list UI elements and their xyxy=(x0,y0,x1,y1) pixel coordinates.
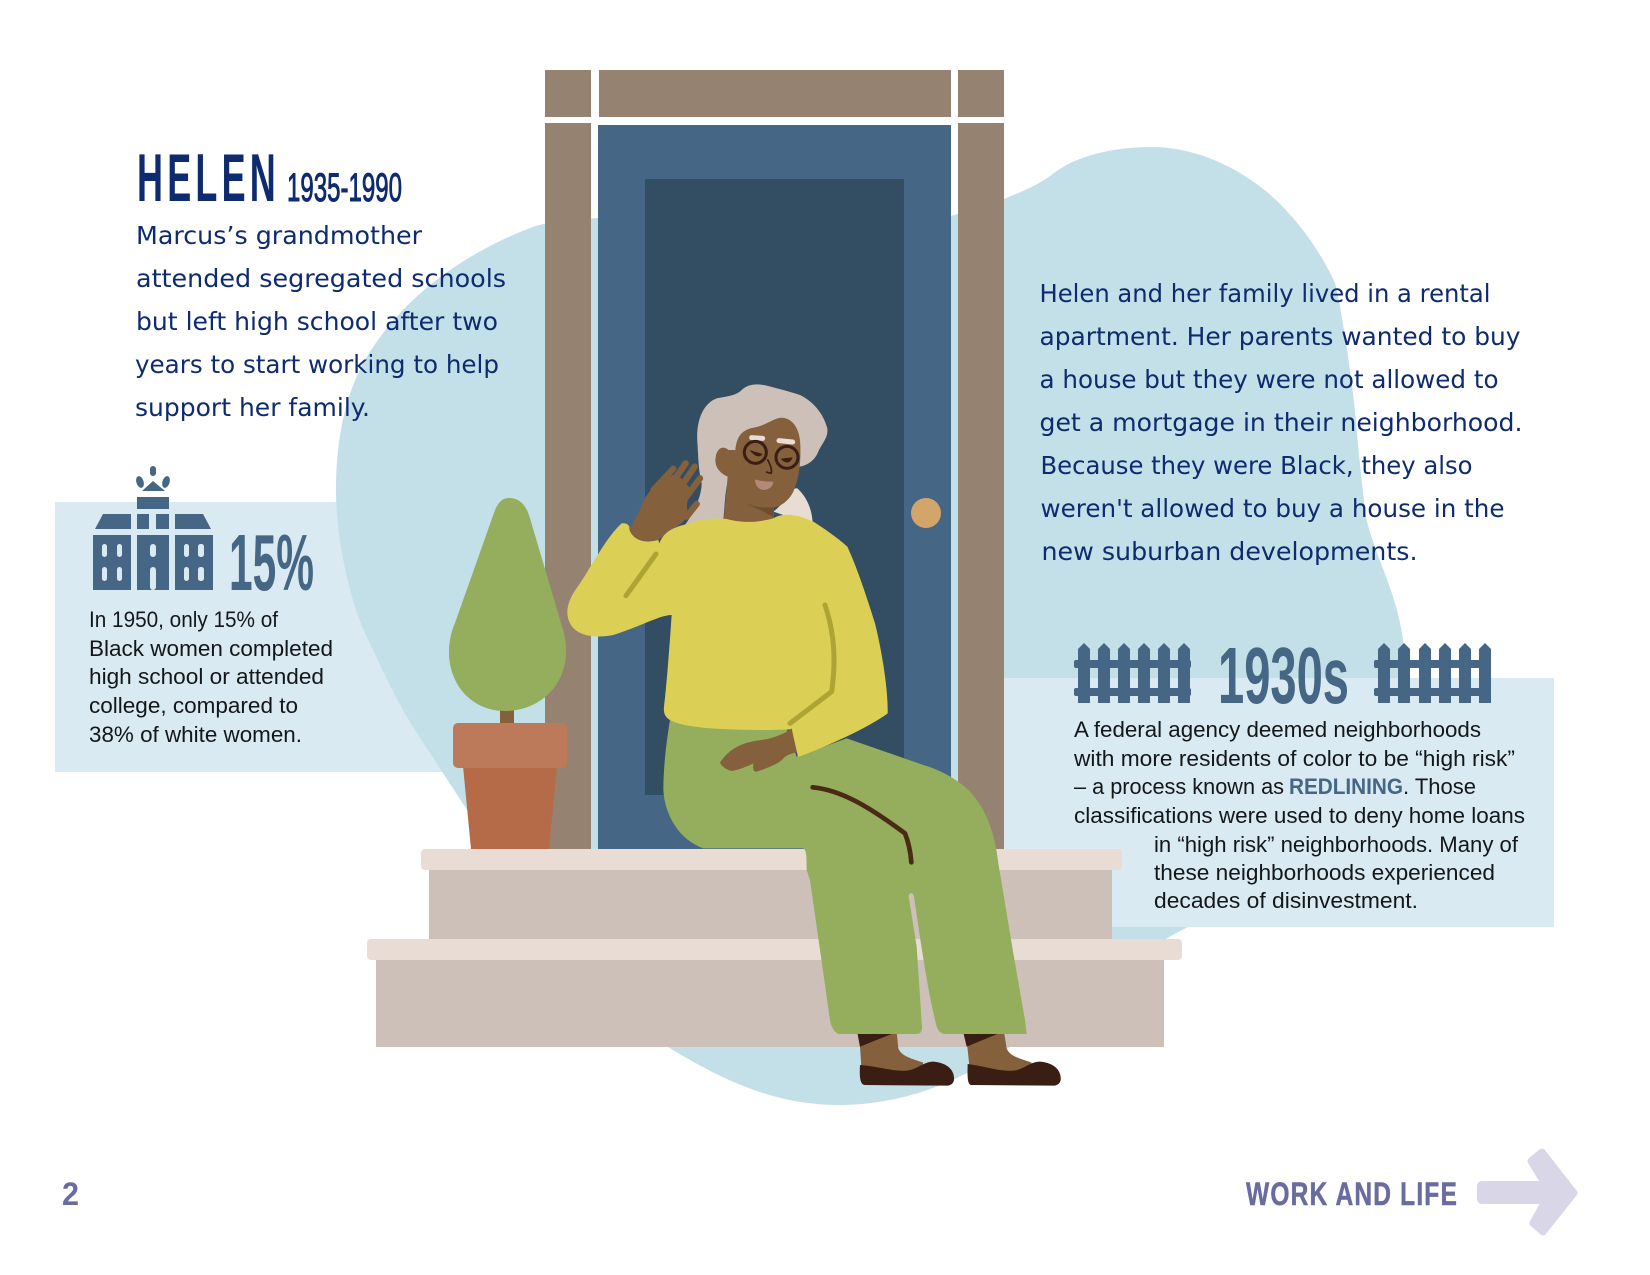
raised hand xyxy=(629,463,700,545)
head, hair and sweater xyxy=(567,384,888,757)
door xyxy=(598,125,951,850)
text block: 1950 statistic xyxy=(89,607,333,747)
text block: rental apartment: Because they were Black, they also xyxy=(1040,451,1472,480)
text block: 1950 statistic: 38% of white women. xyxy=(89,722,302,747)
door knob xyxy=(911,498,941,528)
sweater xyxy=(567,515,888,757)
door frame xyxy=(545,70,1004,850)
text block: redlining: classifications were used to deny home loans xyxy=(1074,803,1525,828)
potted plant xyxy=(449,498,567,849)
character: Helen waving xyxy=(567,384,1061,1086)
text block: 1950 statistic: Black women completed xyxy=(89,636,333,661)
text block: redlining: with more residents of color to be “high risk” xyxy=(1073,746,1515,771)
glasses xyxy=(744,441,798,468)
text block: redlining: decades of disinvestment. xyxy=(1154,888,1418,913)
eyebrows xyxy=(752,438,793,442)
text block: redlining: A federal agency deemed neighborhoods xyxy=(1074,717,1481,742)
text block: redlining: REDLINING xyxy=(1289,774,1403,799)
text block: 1950 statistic: In 1950, only 15% of xyxy=(89,607,279,632)
panel: 15% statistic background xyxy=(55,502,475,772)
statistic: 15%: 15% xyxy=(229,518,314,607)
title: Helen: HELEN xyxy=(137,140,280,216)
text block: redlining xyxy=(1073,717,1525,913)
nose xyxy=(766,459,771,473)
mouth xyxy=(755,479,773,490)
text block: redlining: in “high risk” neighborhoods. Many of xyxy=(1154,832,1519,857)
text block: redlining: – a process known as xyxy=(1074,774,1284,799)
title: Helen: 1935-1990 xyxy=(287,166,402,210)
front steps xyxy=(367,849,1182,1047)
text block: 1950 statistic: high school or attended xyxy=(89,664,324,689)
icon: left picket fence xyxy=(1074,643,1191,703)
text block: Marcus's grandmother xyxy=(135,221,506,422)
text block: rental apartment xyxy=(1040,279,1522,566)
text block: redlining: . Those xyxy=(1403,774,1476,799)
resting hand xyxy=(720,728,797,772)
text block: Marcus's grandmother: Marcus’s grandmother xyxy=(136,221,423,250)
footer label: work and life: WORK AND LIFE xyxy=(1246,1176,1458,1212)
text block: Marcus's grandmother: but left high school after two xyxy=(136,307,498,336)
text block: rental apartment: get a mortgage in their neighborhood. xyxy=(1040,408,1522,437)
arrow: next page xyxy=(1477,1152,1574,1232)
text block: Marcus's grandmother: years to start working to help xyxy=(135,350,499,379)
text block: redlining: these neighborhoods experienced xyxy=(1154,860,1495,885)
text block: rental apartment: new suburban developments. xyxy=(1042,537,1418,566)
page number: 2 xyxy=(62,1176,79,1212)
legs and trousers xyxy=(663,720,1061,1086)
icon: right picket fence xyxy=(1374,643,1491,703)
text block: rental apartment: apartment. Her parents wanted to buy xyxy=(1040,322,1520,351)
text block: rental apartment: Helen and her family lived in a rental xyxy=(1040,279,1490,308)
text block: 1950 statistic: college, compared to xyxy=(89,693,298,718)
icon: school building xyxy=(93,466,213,590)
text block: rental apartment: a house but they were not allowed to xyxy=(1040,365,1498,394)
panel: 1930s background xyxy=(1000,678,1554,927)
heading: 1930s: 1930s xyxy=(1218,631,1349,720)
text block: Marcus's grandmother: support her family. xyxy=(135,393,370,422)
text block: rental apartment: weren't allowed to buy a house in the xyxy=(1040,494,1504,523)
text block: Marcus's grandmother: attended segregated schools xyxy=(136,264,506,293)
background blob xyxy=(336,147,1408,1105)
